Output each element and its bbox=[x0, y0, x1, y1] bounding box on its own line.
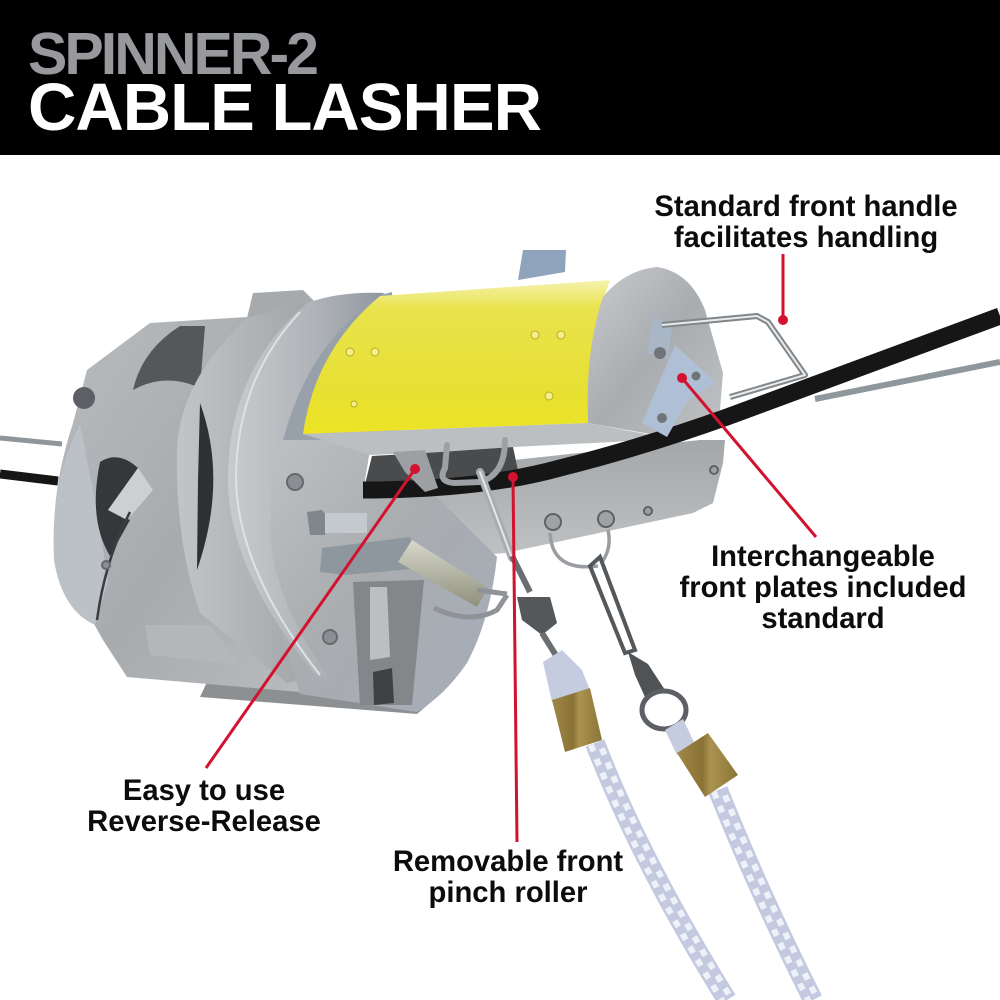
callout: pinch roller bbox=[393, 472, 623, 909]
rim highlight bbox=[236, 312, 320, 675]
ring bolts bbox=[102, 474, 392, 689]
lower window bar bbox=[370, 587, 390, 660]
left swivel bbox=[517, 597, 557, 635]
lever cylinder bbox=[398, 540, 488, 607]
snap hook bbox=[590, 557, 635, 653]
swivel bbox=[628, 652, 665, 697]
front plate bbox=[642, 345, 715, 437]
rim backing bbox=[278, 292, 400, 440]
lasher machine bbox=[54, 250, 1000, 714]
rear drum body bbox=[54, 317, 300, 692]
title line 2: CABLE LASHER bbox=[28, 70, 542, 145]
handle bbox=[662, 316, 805, 397]
title line 1: SPINNER-2 bbox=[28, 21, 319, 87]
ring bbox=[642, 691, 686, 729]
header band bbox=[0, 0, 1000, 155]
callout: standard front handle: facilitates handling bbox=[674, 222, 938, 254]
square plate bbox=[108, 468, 153, 520]
lower window roller bbox=[373, 668, 394, 705]
left rope assembly bbox=[512, 556, 731, 1000]
callout: pinch roller: Removable front bbox=[393, 846, 623, 878]
retaining wire bbox=[97, 512, 130, 620]
right brass ferrule bbox=[677, 733, 738, 797]
yellow cover bbox=[303, 280, 610, 434]
pinch roller J hooks bbox=[443, 440, 512, 558]
callout: interchangeable front plates: Interchangeable bbox=[711, 541, 935, 573]
disc rim bbox=[228, 293, 385, 682]
reverse release bracket bbox=[393, 450, 438, 492]
side bolt bbox=[73, 387, 95, 409]
callout: pinch roller: pinch roller bbox=[429, 877, 587, 909]
spool slot bbox=[197, 403, 213, 570]
callout: standard front handle bbox=[654, 191, 958, 325]
callout: standard front handle: Standard front handle bbox=[654, 191, 958, 223]
left rope eye bbox=[543, 650, 590, 702]
outer band bbox=[177, 303, 317, 683]
front plate bracket bbox=[647, 315, 672, 360]
upper window bbox=[133, 326, 205, 390]
lever hook bbox=[434, 590, 507, 617]
main disc face bbox=[269, 420, 497, 712]
front plate bolts bbox=[654, 347, 700, 423]
lever bolt bbox=[307, 510, 367, 535]
callout: interchangeable front plates: standard bbox=[761, 603, 885, 635]
callout: interchangeable front plates: front plates included bbox=[679, 572, 967, 604]
right rope assembly bbox=[550, 530, 817, 1000]
right rope bbox=[714, 788, 817, 1000]
front end cap bbox=[588, 267, 723, 437]
callout: reverse-release: Reverse-Release bbox=[87, 806, 321, 838]
dark gap bbox=[363, 447, 520, 492]
base plate bbox=[200, 682, 445, 714]
lower body bolts bbox=[545, 466, 718, 530]
lever bracket bbox=[320, 537, 422, 575]
callout: reverse-release: Easy to use bbox=[123, 775, 285, 807]
lower rear plate bbox=[145, 625, 240, 665]
rear mounting tab bbox=[518, 250, 566, 280]
lower window frame bbox=[353, 580, 424, 705]
U hooks bbox=[550, 530, 609, 567]
lower body bbox=[420, 440, 725, 556]
callout: reverse-release bbox=[87, 464, 420, 838]
black lashing cable bbox=[363, 316, 1000, 490]
cover underside strip bbox=[303, 423, 667, 455]
top bracket bbox=[247, 290, 315, 320]
cables behind the machine bbox=[0, 362, 1000, 481]
left brass ferrule bbox=[552, 688, 602, 752]
callout: interchangeable front plates bbox=[677, 373, 967, 635]
right rope eye bbox=[665, 719, 694, 755]
yellow cover rivets bbox=[346, 331, 565, 407]
left drum lobe bbox=[54, 425, 108, 625]
left spool opening bbox=[96, 457, 138, 556]
left rope bbox=[591, 741, 731, 1000]
